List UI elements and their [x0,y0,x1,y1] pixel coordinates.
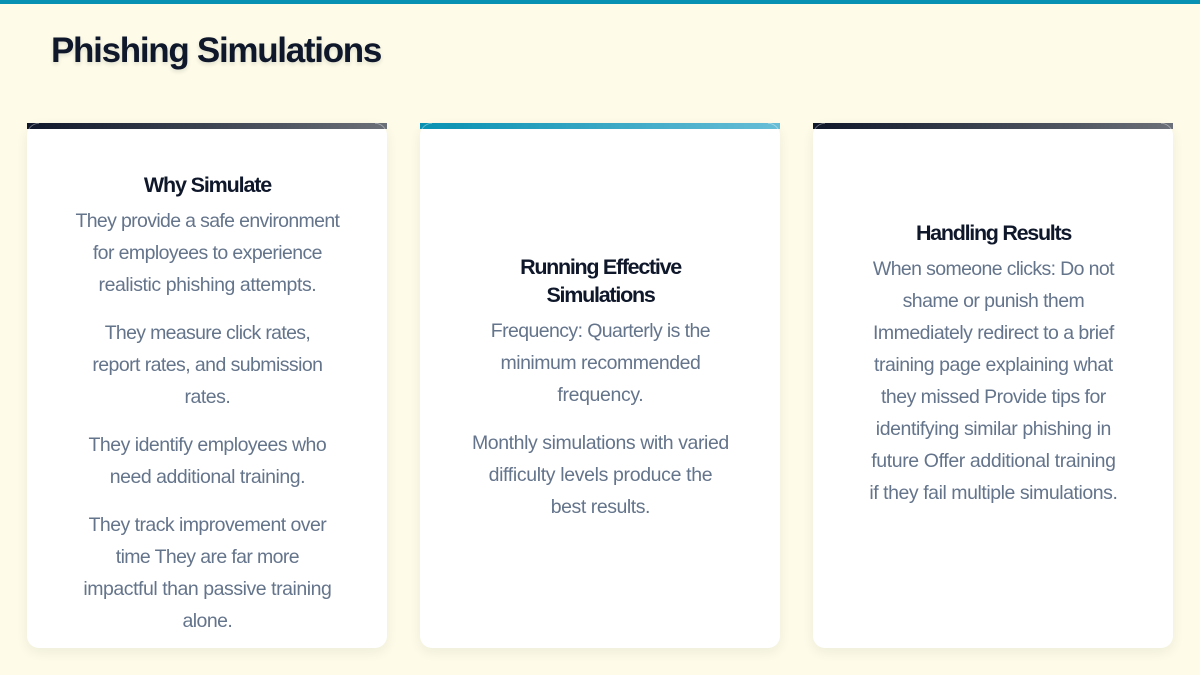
panel: why simulate [27,123,387,648]
title: Phishing Simulations [51,31,381,70]
text: frequency: frequency. [557,384,643,406]
text: track improvement: impactful than passive training [83,578,331,600]
text: monthly simulations [472,432,729,518]
text: identify employees [88,434,326,488]
text: measured rates: rates. [184,386,230,408]
text: handling steps: they missed Provide tips for [881,386,1106,408]
text: handling steps: training page explaining what [874,354,1113,376]
text: monthly simulations: best results. [551,496,650,518]
text: safe environment: They provide a safe environment [75,210,339,232]
text: identify employees: need additional training. [110,466,305,488]
text: handling steps: identifying similar phishing in [876,418,1111,440]
heading: running effective simulations [520,255,682,307]
text: monthly simulations: difficulty levels produce the [489,464,712,486]
text: handling steps: When someone clicks: Do not [873,258,1114,280]
text: handling steps: Immediately redirect to a brief [873,322,1114,344]
panel: handling results [813,123,1173,648]
text: frequency: minimum recommended [500,352,700,374]
heading: why simulate: Why Simulate [144,173,271,197]
heading: running effective simulations: Running Effective [520,255,681,279]
card accent bar: why simulate [27,123,387,129]
heading: handling results: Handling Results [916,221,1071,245]
card accent bar: handling results [813,123,1173,129]
text: frequency: Frequency: Quarterly is the [491,320,710,342]
text: track improvement [83,514,331,632]
text: handling steps: shame or punish them [903,290,1084,312]
text: handling steps: if they fail multiple simulations. [869,482,1117,504]
text: frequency [491,320,710,406]
text: track improvement: alone. [182,610,232,632]
text: measured rates: They measure click rates, [105,322,310,344]
text: safe environment: realistic phishing attempts. [99,274,316,296]
text: safe environment [75,210,340,296]
text: monthly simulations: Monthly simulations with varied [472,432,729,454]
text: identify employees: They identify employees who [89,434,326,456]
panel: running effective simulations [420,123,780,648]
text: safe environment: for employees to experience [93,242,322,264]
text: handling steps [869,258,1117,504]
top accent bar [0,0,1200,4]
text: track improvement: They track improvement over [89,514,326,536]
text: track improvement: time They are far more [116,546,299,568]
text: measured rates: report rates, and submission [92,354,322,376]
text: handling steps: future Offer additional training [871,450,1116,472]
heading: running effective simulations: Simulations [546,283,655,307]
card accent bar: running effective simulations [420,123,780,129]
text: measured rates [92,322,322,408]
